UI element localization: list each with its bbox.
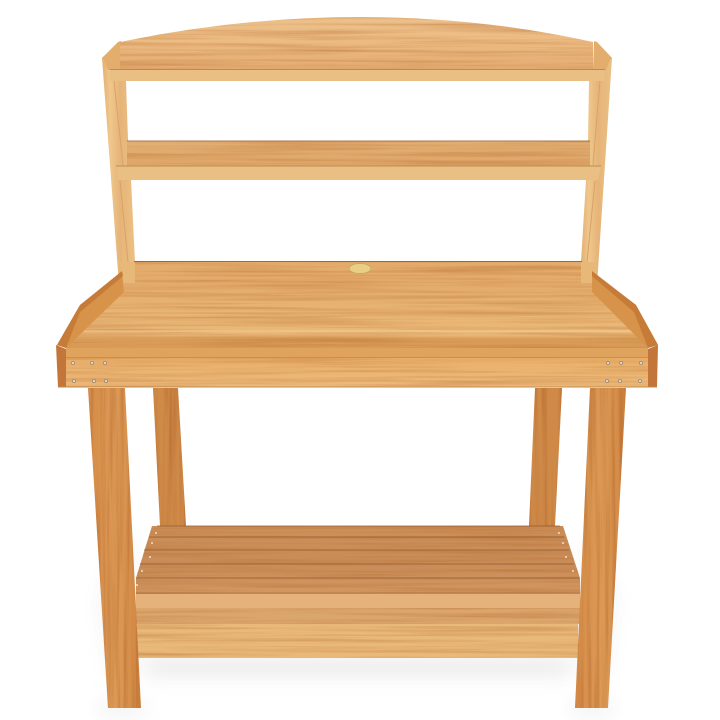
hutch uprights: [102, 41, 612, 285]
middle shelf back: [127, 141, 590, 167]
left back leg: [153, 388, 186, 526]
arched back board: [120, 17, 593, 70]
top shelf lip: [110, 70, 605, 81]
right side wall top edge: [592, 271, 658, 348]
middle shelf: [116, 140, 601, 180]
front right leg: [575, 388, 626, 708]
middle shelf lip: [116, 166, 601, 180]
right upright cap: [593, 41, 612, 70]
plank seams: [96, 296, 624, 313]
lower shelf: [136, 526, 580, 658]
left side wall top edge: [57, 271, 123, 348]
left upright seam: [114, 81, 128, 262]
upright feet: [119, 262, 135, 283]
pale slat: [136, 594, 580, 608]
right back leg: [529, 388, 562, 526]
right upright: [581, 41, 612, 285]
left upright cap: [102, 41, 122, 70]
left upright: [102, 41, 135, 285]
slat gaps: [136, 526, 580, 593]
lower rear slat: [136, 608, 580, 624]
lower apron: [137, 624, 578, 658]
front edge strip: [66, 348, 648, 358]
right end: [648, 345, 658, 387]
right upright seam: [587, 81, 600, 262]
floor shadow: [100, 530, 615, 712]
front apron: [66, 358, 648, 387]
left side wall: [57, 272, 124, 348]
shelf screws: [136, 532, 574, 586]
back legs: [153, 388, 562, 526]
right side wall: [592, 272, 658, 348]
work surface: [65, 283, 648, 348]
slatted surface: [136, 526, 580, 594]
bench top: [56, 261, 658, 388]
brass hole: [349, 264, 371, 274]
back panel: [122, 262, 594, 284]
front left leg: [88, 388, 141, 708]
apron screws: [71, 361, 643, 383]
left end: [56, 345, 66, 387]
